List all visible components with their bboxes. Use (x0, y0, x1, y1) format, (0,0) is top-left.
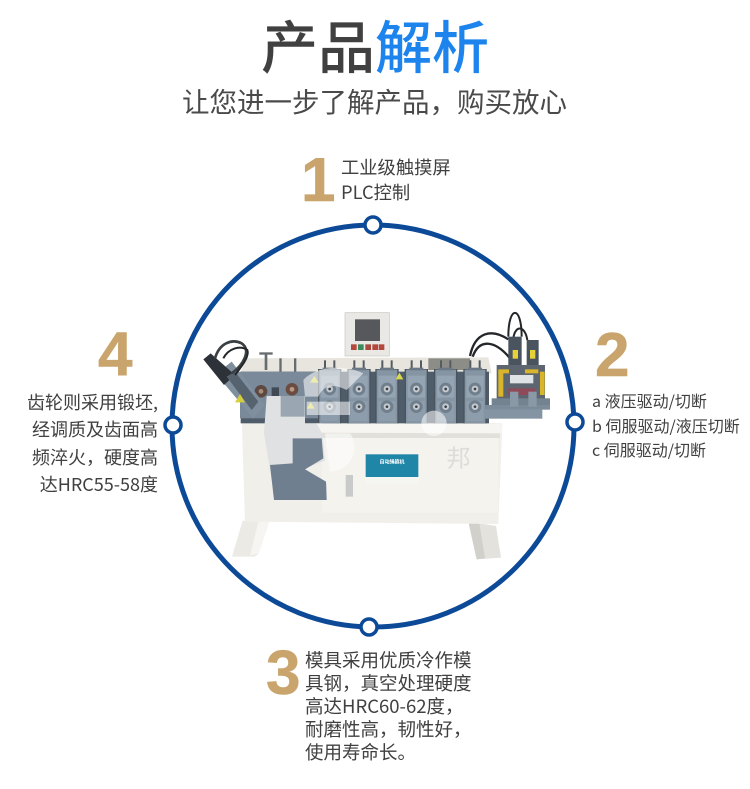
text: feature 4 (27, 389, 158, 497)
number 3: 3 (266, 639, 300, 708)
right hydraulic cutter (470, 313, 550, 419)
node: left (165, 417, 181, 433)
drive housing (241, 372, 489, 423)
title: 产品解析 (261, 3, 489, 85)
subtitle: 让您进一步了解产品，购买放心 (182, 80, 567, 120)
text: feature 3: 模具采用优质冷作模 (305, 647, 472, 673)
warning triangles (307, 373, 403, 409)
text: feature 2: a 液压驱动/切断 (592, 388, 707, 412)
text: feature 1: 工业级触摸屏 (341, 154, 451, 180)
watermark character: 邦 (447, 439, 471, 474)
name plate (366, 454, 418, 484)
roller modules (318, 360, 487, 423)
machine body (242, 415, 502, 524)
node: bottom (361, 619, 377, 635)
front table (317, 423, 503, 433)
node: top (365, 217, 381, 233)
number 2: 2 (595, 321, 629, 390)
text: feature 3: 具钢，真空处理硬度 (305, 670, 472, 696)
number 1: 1 (301, 146, 335, 215)
small label (346, 475, 353, 497)
number 4: 4 (98, 320, 132, 389)
side guard plate (264, 396, 327, 500)
brown rollers (255, 383, 298, 398)
right leg (468, 522, 501, 559)
back tray (240, 357, 492, 373)
text: feature 1 (341, 154, 451, 205)
text: feature 3 (305, 647, 472, 765)
text: feature 2 (592, 388, 740, 461)
control panel (345, 313, 389, 356)
blue circle ring (172, 225, 574, 627)
machine (203, 313, 550, 559)
text: feature 2: b 伺服驱动/液压切断 (592, 412, 740, 436)
left feeder arm (203, 341, 265, 418)
text: feature 4: 齿轮则采用锻坯, (27, 389, 158, 415)
text: feature 1: PLC控制 (341, 179, 410, 205)
text: feature 3: 耐磨性高，韧性好， (305, 716, 472, 742)
text: feature 2: c 伺服驱动/切断 (592, 437, 706, 461)
watermark (303, 368, 447, 472)
node: right (567, 414, 583, 430)
top knob and rods (259, 352, 296, 372)
text: feature 3: 使用寿命长。 (305, 739, 416, 765)
text: feature 4: 经调质及齿面高 (32, 416, 158, 442)
left leg (232, 521, 269, 557)
text: feature 4: 达HRC55-58度 (40, 471, 158, 497)
text: feature 3: 高达HRC60-62度， (305, 693, 464, 719)
name plate: 自动绳箍机 (380, 458, 404, 465)
text: feature 4: 频淬火，硬度高 (32, 444, 158, 470)
